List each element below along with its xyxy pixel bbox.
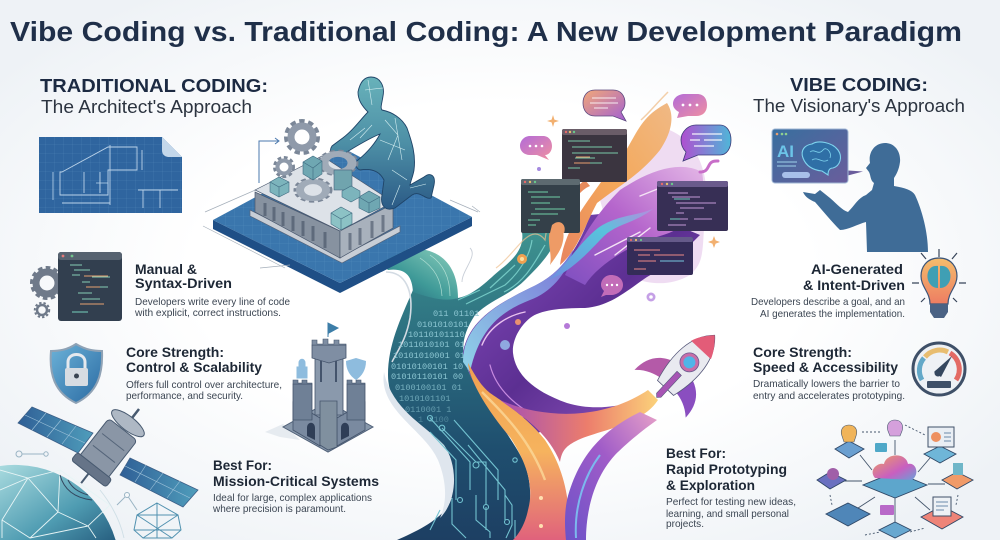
icon: gears and code window <box>32 252 122 321</box>
block: mission-critical systems <box>212 457 379 515</box>
small highlights in purple <box>482 188 660 420</box>
block: manual and syntax-driven: with explicit, correct instructions. <box>134 308 281 319</box>
block: speed and accessibility: Dramatically lowers the barrier to <box>753 379 900 390</box>
block: manual and syntax-driven <box>32 252 290 321</box>
chat bubble 5 <box>601 275 623 297</box>
block: rapid prototyping: learning, and small personal <box>666 509 789 520</box>
block: speed and accessibility: Core Strength: <box>753 344 852 360</box>
polygon sphere <box>134 503 181 538</box>
blueprint platform <box>213 217 472 293</box>
mesh figure <box>331 77 434 209</box>
right heading: The Visionary's Approach <box>753 95 965 116</box>
small bulbs <box>841 425 857 442</box>
block: AI-generated and intent-driven: Developers describe a goal, and an <box>751 297 905 308</box>
icon: brain light bulb <box>912 249 966 318</box>
right heading: VIBE CODING: <box>790 74 928 95</box>
small shield <box>346 358 366 380</box>
chat bubble 2 <box>673 94 707 118</box>
binary stream text <box>391 309 479 425</box>
binary stream text: 1010101101 <box>399 394 451 404</box>
block: mission-critical systems: Ideal for large, complex applications <box>213 493 372 504</box>
purple core stream <box>463 210 700 439</box>
laptop chart <box>928 427 954 447</box>
block: rapid prototyping: & Exploration <box>666 477 755 493</box>
top orange stream <box>560 103 671 265</box>
block: rapid prototyping: Perfect for testing new ideas, <box>666 497 796 508</box>
icon: blueprint sheet <box>39 137 182 213</box>
code window 1 <box>562 129 627 182</box>
tiles <box>817 441 973 538</box>
chat bubble 1 <box>583 90 626 121</box>
icon: shield with lock <box>51 344 102 403</box>
icon: visionary silhouette with AI panel <box>772 129 928 252</box>
block: speed and accessibility: Speed & Accessibility <box>753 359 898 375</box>
block: control and scalability <box>51 344 282 403</box>
left heading: The Architect's Approach <box>41 96 252 117</box>
block: AI-generated and intent-driven <box>751 249 966 320</box>
block: control and scalability: Offers full control over architecture, <box>126 380 282 391</box>
base slab <box>250 210 400 263</box>
cyan ribbon band <box>548 208 654 280</box>
block: control and scalability: performance, and security. <box>126 391 243 402</box>
code window 2 <box>521 179 580 233</box>
block: mission-critical systems: where precision is paramount. <box>212 504 346 515</box>
glowing dots <box>500 115 720 528</box>
block: speed and accessibility <box>753 343 965 402</box>
block: rapid prototyping: Rapid Prototyping <box>666 461 787 477</box>
small lock <box>297 359 307 378</box>
building walls <box>255 192 340 258</box>
binary stream text: 01010110101 00 <box>391 372 463 382</box>
icon: idea network diagram <box>817 420 973 538</box>
binary stream text: 10110101110 <box>408 330 465 340</box>
white-grey swoosh <box>383 372 454 518</box>
block: manual and syntax-driven: Manual & <box>135 261 197 277</box>
chat bubble 3 <box>681 125 731 161</box>
block: control and scalability: Control & Scalability <box>126 359 262 375</box>
illustration: flowing ribbon streams <box>375 92 720 540</box>
binary stream text: 1 1100 <box>418 415 449 425</box>
small nodes <box>827 468 839 480</box>
block: manual and syntax-driven: Developers write every line of code <box>135 297 290 308</box>
icon: castle tower <box>265 323 373 452</box>
illustration: architect building block system <box>203 77 480 293</box>
arrow on platform <box>259 138 279 183</box>
orange splash <box>549 224 564 265</box>
satellite body <box>64 395 156 497</box>
block: manual and syntax-driven: Syntax-Driven <box>135 275 232 291</box>
circuit traces <box>428 416 517 538</box>
teal streaks near windows <box>458 240 545 304</box>
code window 3 <box>657 181 728 231</box>
cubes <box>270 156 380 230</box>
gears <box>275 122 356 201</box>
left heading: TRADITIONAL CODING: <box>40 75 268 96</box>
block: rapid prototyping: Best For: <box>666 445 726 461</box>
silhouette <box>803 143 928 252</box>
building top <box>255 156 393 231</box>
icon: satellite and network globe <box>0 395 198 540</box>
lower orange stream <box>468 363 570 540</box>
icon: speed gauge <box>913 343 965 395</box>
rocket exhaust trail <box>500 390 658 462</box>
left heading <box>40 75 268 117</box>
block: rapid prototyping <box>666 445 796 530</box>
block: AI-generated and intent-driven: & Intent-Driven <box>803 277 905 293</box>
icon: visionary silhouette with AI panel: AI <box>777 142 794 161</box>
dark teal code stream <box>388 228 560 540</box>
binary stream text: 011 01101 <box>433 309 479 319</box>
title: Vibe Coding vs. Traditional Coding: A New Development Paradigm <box>10 16 962 47</box>
block: speed and accessibility: entry and accelerates prototyping. <box>753 391 905 402</box>
chat bubble 4 <box>520 136 552 160</box>
code window 4 <box>627 237 693 275</box>
haze behind top stream <box>600 125 707 283</box>
top lilac-purple stream <box>565 167 703 285</box>
teal curl <box>375 249 458 300</box>
brain outline <box>802 142 840 175</box>
binary stream text: 01010100101 10 <box>391 362 463 372</box>
solar panels <box>18 407 93 453</box>
illustration: rocket <box>631 311 740 421</box>
block: AI-generated and intent-driven: AI generates the implementation. <box>760 309 905 320</box>
blue edge band <box>463 250 573 372</box>
lower purple branch <box>565 412 657 540</box>
block: control and scalability: Core Strength: <box>126 344 224 360</box>
binary stream text: 0110001 1 <box>405 405 451 415</box>
block: rapid prototyping: projects. <box>666 519 704 530</box>
binary stream text: 0100100101 01 <box>395 383 462 393</box>
block: AI-generated and intent-driven: AI-Generated <box>811 261 903 277</box>
block: mission-critical systems: Mission-Critical Systems <box>213 473 379 489</box>
right heading <box>753 74 965 116</box>
binary stream text: 10101010001 01 <box>393 351 465 361</box>
binary stream text: 0101010101 <box>417 320 469 330</box>
block: mission-critical systems: Best For: <box>213 457 272 473</box>
binary stream text: 1011010101 01 <box>398 340 465 350</box>
